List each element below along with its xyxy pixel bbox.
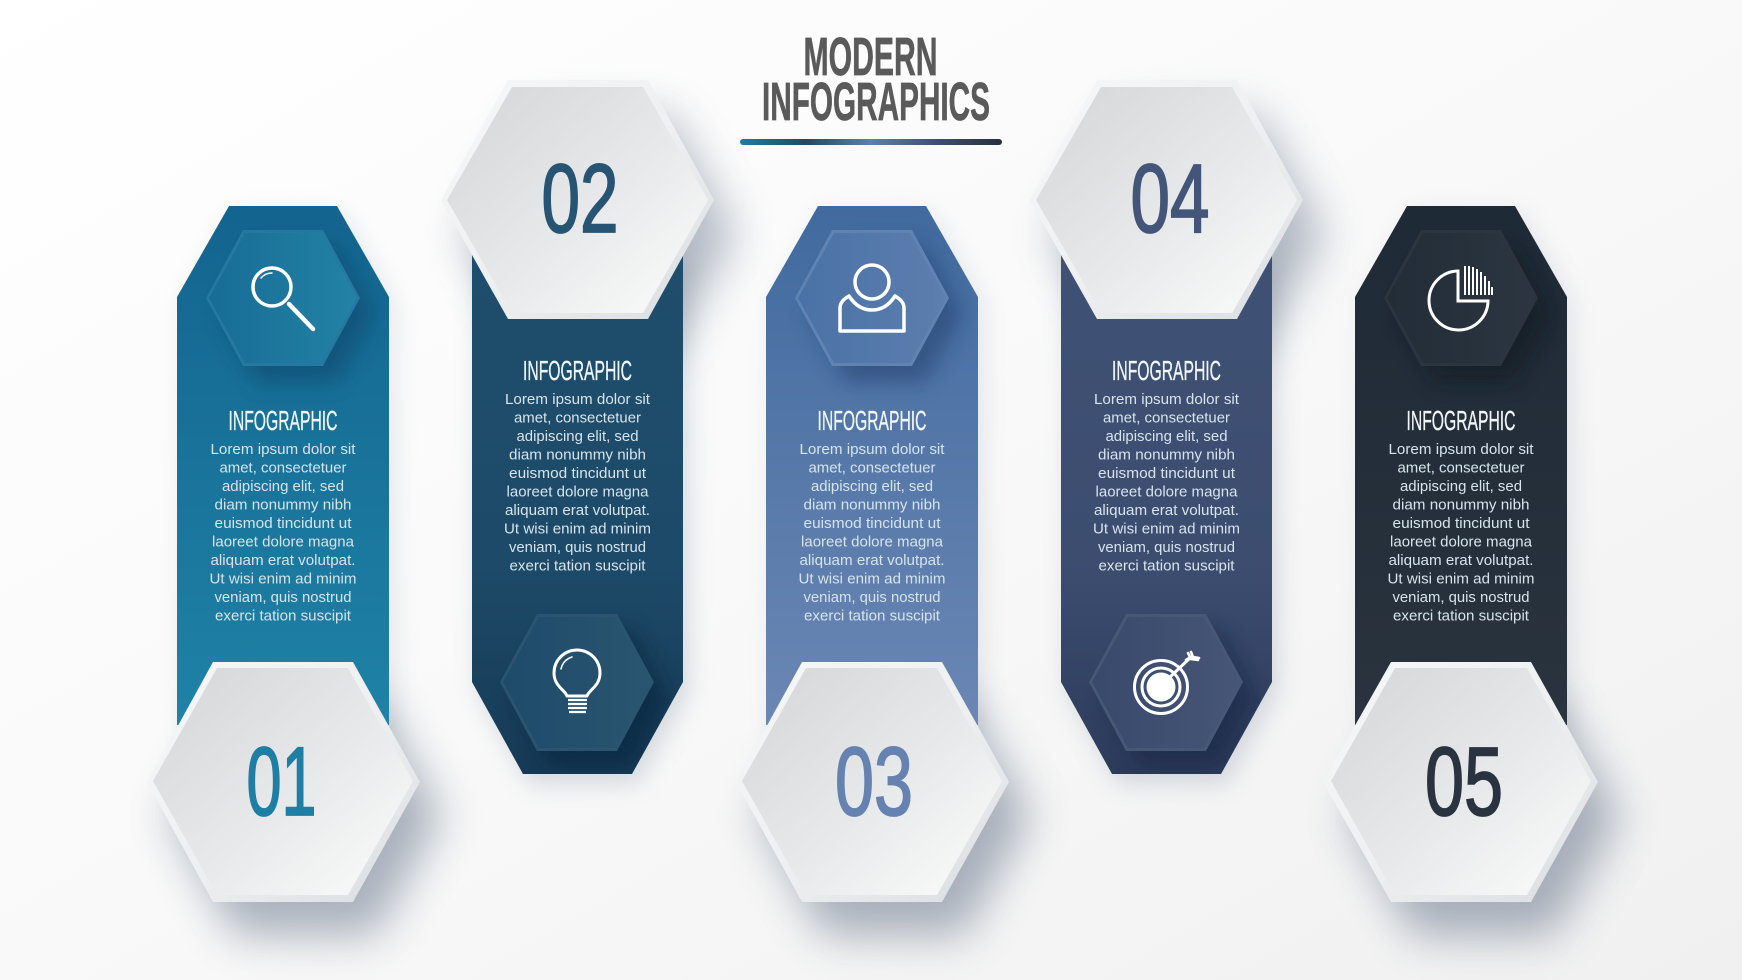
text block: amet, consectetuer (514, 410, 641, 426)
text block: Lorem ipsum dolor sit (210, 441, 356, 458)
icon: pie chart (1429, 266, 1492, 330)
text block: exerci tation suscipit (1098, 558, 1235, 574)
text block: laoreet dolore magna (1390, 534, 1533, 550)
text block: diam nonummy nibh (509, 446, 646, 464)
panel: step 01 (169, 206, 442, 936)
text block: veniam, quis nostrud (1098, 539, 1235, 556)
text block: aliquam erat volutpat. (1094, 502, 1239, 519)
text block: adipiscing elit, sed (516, 428, 638, 445)
text block: adipiscing elit, sed (811, 478, 933, 495)
heading: INFOGRAPHIC (818, 405, 926, 436)
text block: laoreet dolore magna (212, 534, 355, 550)
text block (1093, 391, 1240, 574)
heading: INFOGRAPHIC (1406, 405, 1516, 436)
text block: Ut wisi enim ad minim (1093, 520, 1240, 538)
panel: step 04 (1052, 114, 1325, 784)
text block: euismod tincidunt ut (214, 515, 352, 532)
text block: diam nonummy nibh (1392, 496, 1530, 514)
text block: diam nonummy nibh (1098, 446, 1235, 464)
text block: Ut wisi enim ad minim (504, 520, 651, 538)
text block: Lorem ipsum dolor sit (1094, 391, 1240, 408)
icon: person (840, 265, 904, 331)
number hexagon 05 (1323, 662, 1598, 902)
number hexagon 01: 01 (246, 727, 316, 836)
text block: amet, consectetuer (808, 460, 936, 476)
text block: euismod tincidunt ut (509, 465, 647, 482)
text block: amet, consectetuer (1398, 460, 1524, 476)
number hexagon 02: 02 (542, 144, 618, 253)
heading: INFOGRAPHIC (523, 355, 632, 386)
text block: diam nonummy nibh (214, 496, 352, 514)
text block: aliquam erat volutpat. (800, 552, 944, 569)
text block: euismod tincidunt ut (804, 515, 941, 532)
number hexagon 04 (1030, 80, 1303, 319)
text block: laoreet dolore magna (506, 484, 649, 500)
text block: Ut wisi enim ad minim (798, 570, 946, 588)
panel: step 03 (758, 206, 1031, 936)
icon hexagon (1089, 614, 1243, 751)
text block: amet, consectetuer (1103, 410, 1230, 426)
text block (798, 441, 946, 624)
text block: veniam, quis nostrud (804, 589, 940, 606)
text block: adipiscing elit, sed (1106, 428, 1228, 445)
text block: Ut wisi enim ad minim (1388, 570, 1534, 588)
text block: Lorem ipsum dolor sit (505, 391, 651, 408)
text block: aliquam erat volutpat. (1388, 552, 1534, 569)
text block: euismod tincidunt ut (1098, 465, 1236, 482)
icon hexagon (1384, 230, 1538, 366)
text block: exerci tation suscipit (215, 608, 352, 624)
text block: aliquam erat volutpat. (210, 552, 356, 569)
text block: laoreet dolore magna (801, 534, 944, 550)
title: MODERN (804, 27, 938, 87)
heading: INFOGRAPHIC (1112, 355, 1221, 386)
text block: exerci tation suscipit (804, 608, 941, 624)
text block: veniam, quis nostrud (509, 539, 646, 556)
number hexagon 03 (736, 662, 1009, 902)
text block: Lorem ipsum dolor sit (1388, 441, 1534, 458)
title underline (740, 139, 1002, 145)
text block: laoreet dolore magna (1096, 484, 1238, 500)
text block (210, 441, 356, 624)
title (762, 27, 990, 132)
panel: step 05 (1347, 206, 1620, 936)
heading: INFOGRAPHIC (228, 405, 338, 436)
text block: Lorem ipsum dolor sit (800, 441, 945, 458)
text block: aliquam erat volutpat. (505, 502, 650, 519)
text block: veniam, quis nostrud (1392, 589, 1530, 606)
number hexagon 05: 05 (1425, 727, 1503, 836)
number hexagon 01 (147, 662, 420, 902)
title: INFOGRAPHICS (762, 72, 990, 132)
text block: Ut wisi enim ad minim (210, 570, 356, 588)
text block: adipiscing elit, sed (1400, 478, 1522, 495)
icon hexagon (206, 230, 360, 366)
text block: amet, consectetuer (220, 460, 346, 476)
number hexagon 02 (441, 80, 714, 319)
number hexagon 03: 03 (835, 727, 913, 836)
icon hexagon (795, 230, 949, 366)
text block: exerci tation suscipit (1393, 608, 1530, 624)
icon: light bulb (554, 650, 600, 712)
text block: veniam, quis nostrud (214, 589, 352, 606)
text block: diam nonummy nibh (804, 496, 940, 514)
text block: adipiscing elit, sed (222, 478, 344, 495)
number hexagon 04: 04 (1130, 144, 1210, 253)
icon hexagon (500, 614, 654, 751)
icon: target (1134, 652, 1199, 714)
text block: exerci tation suscipit (510, 558, 646, 574)
icon: magnifier (253, 268, 313, 329)
text block: euismod tincidunt ut (1392, 515, 1530, 532)
text block (1388, 441, 1534, 624)
panel: step 02 (463, 114, 736, 784)
text block (504, 391, 651, 574)
